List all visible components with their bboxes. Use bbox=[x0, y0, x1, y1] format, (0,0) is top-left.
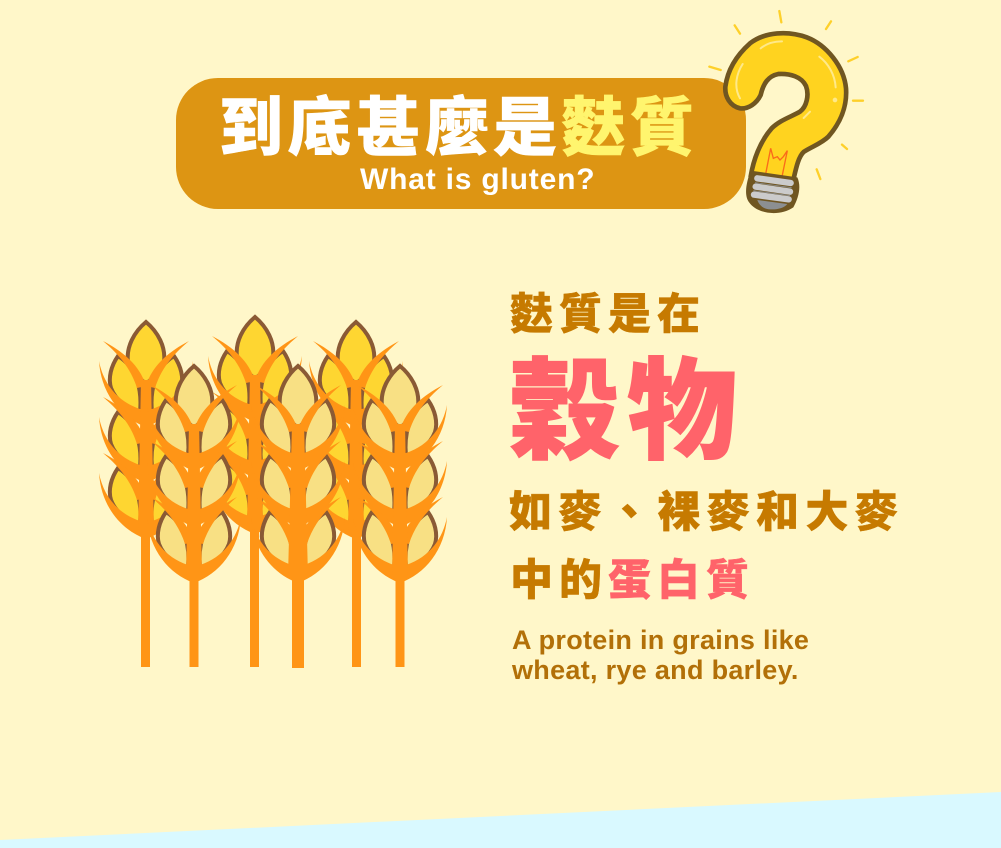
text block: wheat, rye and barley: 如麥、裸麥和大麥 bbox=[509, 489, 904, 537]
wheat stalk: back left bbox=[99, 322, 193, 667]
wheat stalk: back right bbox=[309, 322, 403, 667]
icon: question mark light bulb bbox=[708, 10, 864, 214]
wheat stalk: front left bbox=[147, 366, 241, 667]
wheat stalk: front right bbox=[353, 366, 447, 667]
text block: intro line: 麩質是在 bbox=[510, 291, 706, 339]
title pill bbox=[176, 78, 746, 209]
wheat stalk: back middle bbox=[208, 317, 302, 667]
title: Chinese: 到底甚麼是麩質 bbox=[219, 92, 698, 164]
wheat stalk: front middle bbox=[251, 366, 345, 668]
text block: grains highlight: 穀物 bbox=[509, 351, 745, 474]
text block: English description: A protein in grains like bbox=[512, 625, 809, 655]
text block: English description bbox=[512, 625, 809, 685]
text block: English description: wheat, rye and barley. bbox=[512, 655, 799, 685]
text block: protein line: 中的蛋白質 bbox=[510, 557, 755, 605]
title: English: What is gluten? bbox=[360, 163, 595, 196]
